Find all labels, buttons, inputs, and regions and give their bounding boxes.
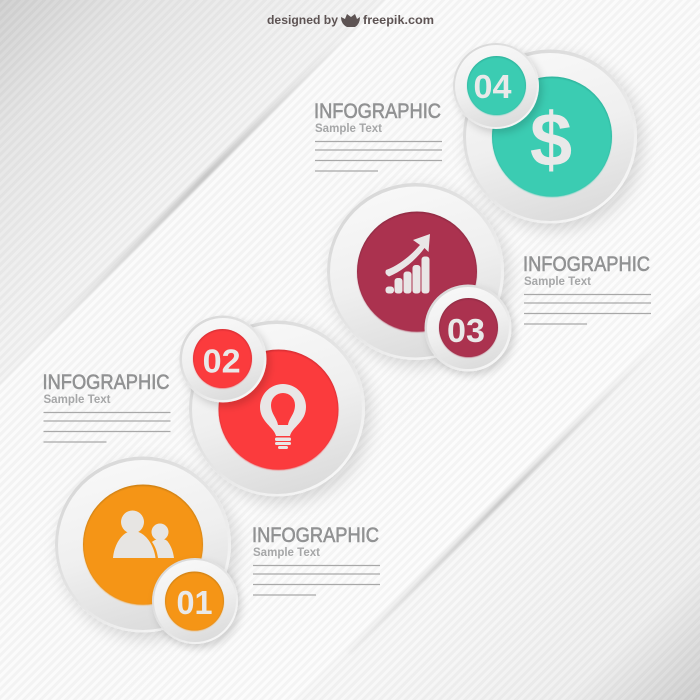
icon: crown xyxy=(341,14,360,27)
text block: step 04: INFOGRAPHIC xyxy=(314,100,441,123)
credit line xyxy=(267,14,434,27)
badge colour 04 xyxy=(467,56,526,115)
large disc 03 xyxy=(327,183,504,360)
large disc 02 xyxy=(189,320,365,496)
text block: step 02: INFOGRAPHIC xyxy=(42,371,170,394)
small badge disc 04 xyxy=(453,43,539,129)
number 03: 03 xyxy=(447,312,485,349)
step 01 xyxy=(55,456,238,644)
text block: step 03: INFOGRAPHIC xyxy=(523,253,650,276)
large disc 04 xyxy=(463,50,637,224)
icon: growth chart xyxy=(385,234,430,294)
number 04: 04 xyxy=(474,68,512,105)
credit line: designed by xyxy=(267,15,339,27)
icon: dollar: $ xyxy=(530,98,572,183)
badge colour 01 xyxy=(165,572,224,631)
step 04 xyxy=(453,43,637,224)
small badge disc 02 xyxy=(180,316,266,402)
colour circle 03 xyxy=(357,212,477,332)
large disc 01 xyxy=(55,456,231,632)
icon: people xyxy=(113,510,174,558)
text block: step 01 xyxy=(252,524,380,595)
text block: step 01: Sample Text xyxy=(253,545,320,559)
text block: step 03: Sample Text xyxy=(524,274,591,288)
colour circle 02 xyxy=(218,350,338,470)
icon: light bulb xyxy=(260,384,306,449)
credit line: freepik.com xyxy=(363,15,434,27)
step 03 xyxy=(327,183,512,372)
small badge disc 01 xyxy=(152,558,238,644)
number 01: 01 xyxy=(176,584,212,621)
badge colour 03 xyxy=(439,298,498,357)
text block: step 04: Sample Text xyxy=(315,121,382,135)
text block: step 03 xyxy=(523,253,651,324)
text block: step 02: Sample Text xyxy=(44,392,110,406)
small badge disc 03 xyxy=(424,284,512,372)
colour circle 04 xyxy=(492,76,612,197)
step 02 xyxy=(180,316,365,496)
text block: step 04 xyxy=(314,100,442,171)
text block: step 01: INFOGRAPHIC xyxy=(252,524,379,547)
badge colour 02 xyxy=(193,329,252,388)
colour circle 01 xyxy=(83,484,203,605)
text block: step 02 xyxy=(42,371,170,442)
number 02: 02 xyxy=(203,343,241,380)
